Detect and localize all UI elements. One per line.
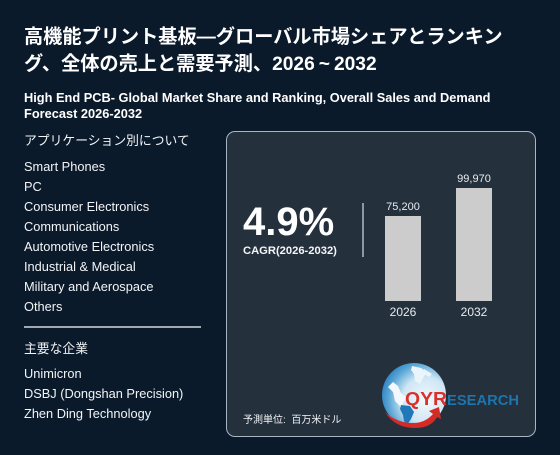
wordmark: QYR	[405, 389, 447, 409]
CAGR value: 4.9%	[243, 200, 334, 244]
label 2026: 2026	[390, 305, 416, 319]
globe	[382, 363, 446, 427]
unit note: 予測単位: 百万米ドル	[243, 415, 341, 426]
subtitle: High End PCB- Global Market Share and Ranking, Overall Sales and Demand	[24, 90, 490, 105]
list: applications: Industrial & Medical	[24, 259, 136, 274]
logo: QYR Research: ESEARCH	[447, 393, 519, 409]
bar chart	[385, 173, 492, 319]
list: companies: Zhen Ding Technology	[24, 406, 151, 421]
heading: applications: アプリケーション別について	[24, 133, 190, 148]
list: applications: Automotive Electronics	[24, 239, 154, 254]
list: companies: Unimicron	[24, 366, 82, 381]
title: 高機能プリント基板―グローバル市場シェアとランキン	[24, 27, 503, 48]
list: applications	[24, 159, 154, 314]
list: applications: PC	[24, 179, 42, 194]
list: applications: Military and Aerospace	[24, 279, 153, 294]
value 2026: 75,200	[386, 201, 420, 213]
bar 2026	[385, 216, 421, 301]
panel: market summary	[226, 131, 536, 437]
CAGR label: CAGR(2026-2032)	[243, 245, 337, 257]
list: applications: Communications	[24, 219, 119, 234]
red swoosh with arrow	[385, 407, 441, 428]
bar 2032	[456, 188, 492, 301]
label 2032: 2032	[461, 305, 487, 319]
heading: key companies: 主要な企業	[24, 341, 88, 356]
list: applications: Consumer Electronics	[24, 199, 149, 214]
title	[24, 26, 503, 75]
list: companies: DSBJ (Dongshan Precision)	[24, 386, 183, 401]
value 2032: 99,970	[457, 173, 491, 185]
subtitle: Forecast 2026-2032	[24, 106, 142, 121]
subtitle	[24, 90, 490, 121]
logo: QYR Research	[382, 363, 519, 428]
list: companies	[24, 366, 183, 421]
list: applications: Smart Phones	[24, 159, 105, 174]
list: applications: Others	[24, 299, 62, 314]
title: グ、全体の売上と需要予測、2026 2032	[24, 54, 377, 75]
title: ~	[319, 54, 330, 75]
